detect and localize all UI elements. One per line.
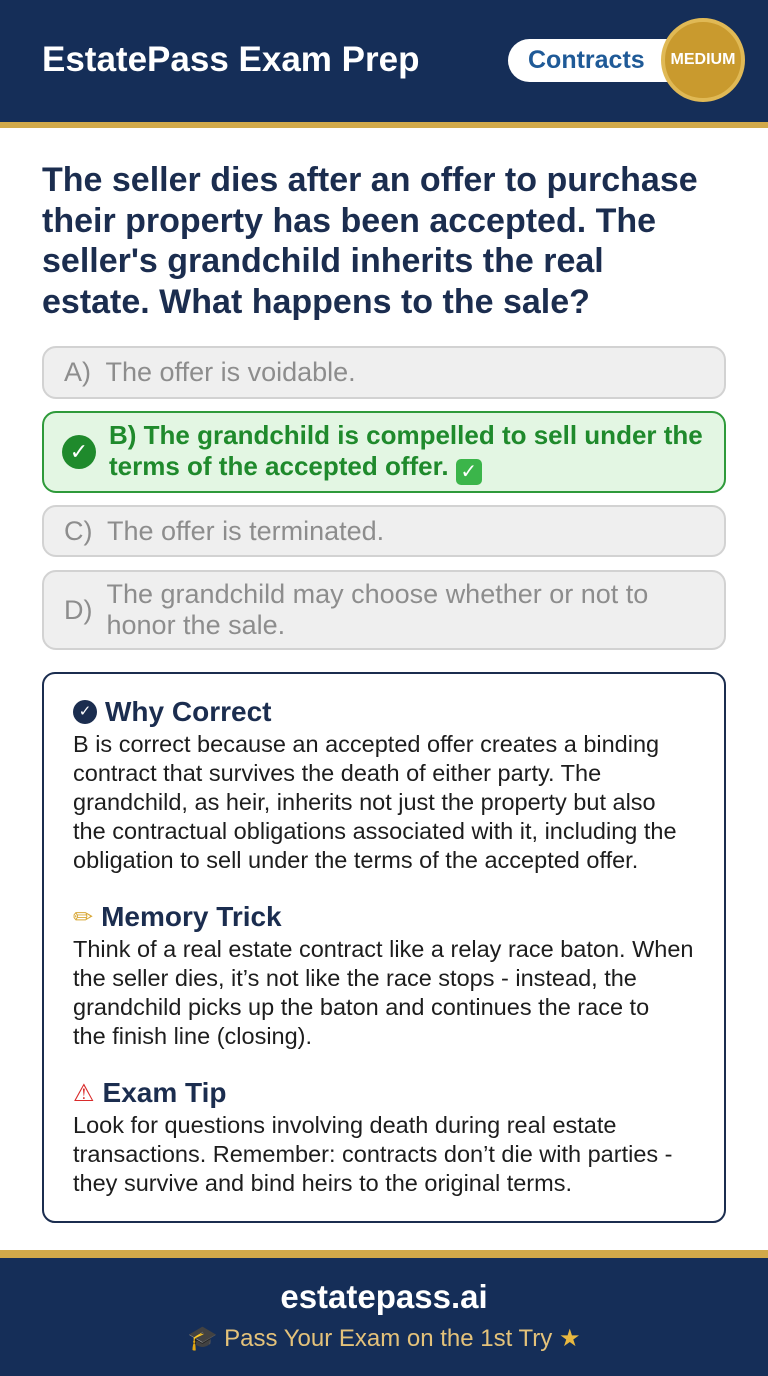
section: why correct: Why Correct bbox=[105, 696, 271, 727]
option B correct: terms of the accepted offer. bbox=[109, 450, 449, 480]
option D bbox=[42, 570, 726, 650]
section: memory trick: grandchild picks up the baton and continues the race to bbox=[73, 994, 649, 1020]
section: memory trick: Think of a real estate contract like a relay race baton. When bbox=[73, 936, 693, 962]
option D: D) bbox=[64, 594, 92, 624]
option D: honor the sale. bbox=[106, 610, 285, 640]
icon: check circle bbox=[62, 435, 96, 469]
category pill: Contracts bbox=[528, 46, 645, 74]
footer tagline: 🎓 Pass Your Exam on the 1st Try ★ bbox=[188, 1325, 580, 1352]
section: exam tip: they survive and bind heirs to the original terms. bbox=[73, 1170, 572, 1196]
section: exam tip: ⚠ bbox=[73, 1080, 95, 1106]
option C bbox=[42, 505, 726, 557]
section: memory trick: ✏ bbox=[73, 904, 93, 930]
difficulty badge bbox=[661, 18, 745, 102]
section: why correct: obligation to sell under the terms of the accepted offer. bbox=[73, 847, 638, 873]
icon: check circle: ✓ bbox=[70, 439, 88, 464]
header bbox=[0, 0, 768, 128]
option D: The grandchild may choose whether or not to bbox=[106, 579, 648, 609]
section: memory trick: the seller dies, it’s not like the race stops - instead, the bbox=[73, 965, 637, 991]
section: why correct: B is correct because an accepted offer creates a binding bbox=[73, 731, 659, 757]
title: EstatePass Exam Prep bbox=[42, 40, 419, 79]
question: their property has been accepted. The bbox=[42, 202, 656, 240]
question: estate. What happens to the sale? bbox=[42, 282, 590, 320]
section: why correct: ✓ bbox=[79, 703, 91, 720]
option B correct: ✓ bbox=[460, 460, 477, 482]
section: memory trick: Memory Trick bbox=[101, 901, 282, 932]
option B correct: B) The grandchild is compelled to sell under the bbox=[109, 420, 703, 450]
difficulty badge: MEDIUM bbox=[671, 51, 735, 68]
category pill bbox=[508, 39, 688, 82]
section: why correct: grandchild, as heir, inherits not just the property but also bbox=[73, 789, 656, 815]
section: exam tip: Look for questions involving death during real estate bbox=[73, 1112, 616, 1138]
section: memory trick bbox=[73, 901, 693, 1049]
section: memory trick: the finish line (closing). bbox=[73, 1023, 312, 1049]
section: exam tip: transactions. Remember: contracts don’t die with parties - bbox=[73, 1141, 673, 1167]
section: why correct: contract that survives the death of either party. The bbox=[73, 760, 601, 786]
section: exam tip: Exam Tip bbox=[103, 1077, 226, 1108]
option A: A) The offer is voidable. bbox=[64, 357, 356, 387]
question bbox=[42, 161, 698, 320]
explanation panel bbox=[42, 672, 726, 1223]
option B correct bbox=[42, 411, 726, 493]
question: The seller dies after an offer to purchase bbox=[42, 161, 698, 199]
section: exam tip bbox=[73, 1077, 673, 1196]
footer bbox=[0, 1250, 768, 1376]
section: why correct bbox=[73, 696, 677, 873]
option A bbox=[42, 346, 726, 399]
footer site: estatepass.ai bbox=[280, 1278, 488, 1315]
question: seller's grandchild inherits the real bbox=[42, 242, 604, 280]
section: why correct: the contractual obligations associated with it, including the bbox=[73, 818, 677, 844]
option C: C) The offer is terminated. bbox=[64, 516, 384, 546]
